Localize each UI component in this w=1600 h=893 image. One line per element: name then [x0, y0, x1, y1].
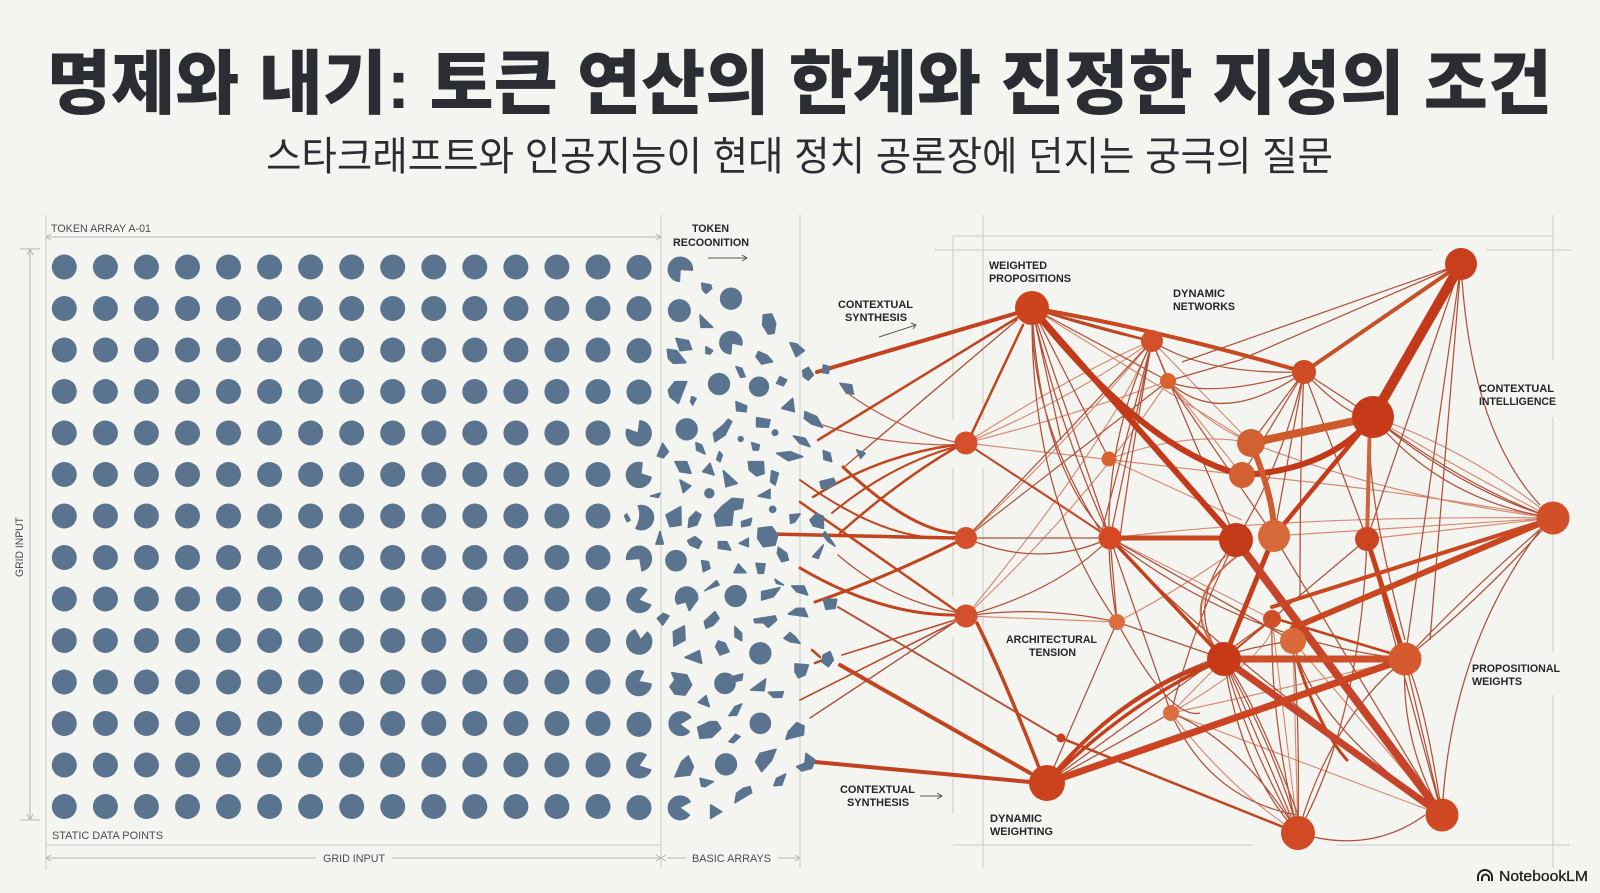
label: token recognition [673, 223, 749, 249]
label: contextual synthesis top: SYNTHESIS [845, 312, 907, 324]
chart: static token grid [52, 254, 611, 819]
label: architectural tension: TENSION [1029, 647, 1076, 659]
label: propositional weights: WEIGHTS [1472, 676, 1522, 688]
label: contextual intelligence: CONTEXTUAL [1479, 383, 1554, 395]
label: weighted propositions [989, 260, 1071, 285]
node: top hub [1445, 248, 1477, 280]
label: dynamic weighting: DYNAMIC [990, 813, 1042, 825]
label: dynamic weighting: WEIGHTING [990, 826, 1053, 838]
logo: NotebookLM: NotebookLM [1499, 868, 1588, 885]
label: token array: TOKEN ARRAY A-01 [51, 223, 151, 235]
label: token recognition: TOKEN [692, 223, 729, 235]
chart: edges from fragments to first network layer [770, 313, 1298, 833]
label: contextual synthesis top: CONTEXTUAL [838, 299, 913, 311]
node: right hub [1536, 502, 1570, 534]
subtitle: 스타크래프트와 인공지능이 현대 정치 공론장에 던지는 궁극의 질문 [266, 135, 1333, 179]
edges: thick [1032, 264, 1553, 815]
label: dynamic networks: NETWORKS [1173, 301, 1235, 313]
label: contextual synthesis bottom: SYNTHESIS [847, 797, 909, 809]
label: propositional weights: PROPOSITIONAL [1472, 663, 1560, 675]
panel: blueprint frame lines [20, 215, 1571, 870]
label: grid input horizontal: GRID INPUT [323, 853, 385, 865]
label: architectural tension: ARCHITECTURAL [1006, 634, 1097, 646]
label: static data points: STATIC DATA POINTS [52, 830, 163, 842]
label: token recognition: RECOONITION [673, 237, 749, 249]
chart: fragmenting tokens lower [626, 545, 837, 820]
label: propositional weights [1472, 663, 1560, 688]
label: contextual synthesis bottom: CONTEXTUAL [840, 784, 915, 796]
label: contextual synthesis top [838, 299, 913, 324]
node: weighted propositions [1015, 291, 1049, 325]
label: dynamic weighting [990, 813, 1053, 838]
label: dynamic networks: DYNAMIC [1173, 288, 1225, 300]
node: largest hub [1352, 396, 1394, 438]
label: weighted propositions: PROPOSITIONS [989, 273, 1071, 285]
label: contextual intelligence [1479, 383, 1556, 408]
nodes [954, 248, 1570, 850]
edges: medium [966, 308, 1390, 760]
node: dynamic weighting [1029, 765, 1065, 801]
label: dynamic networks [1173, 288, 1235, 313]
label: contextual synthesis bottom [840, 784, 915, 809]
label: weighted propositions: WEIGHTED [989, 260, 1047, 272]
arrow: token recognition [708, 255, 747, 261]
label: contextual intelligence: INTELLIGENCE [1479, 396, 1556, 408]
edges: thin light [966, 308, 1553, 833]
label: architectural tension [1006, 634, 1097, 659]
arrow: contextual synthesis top [879, 323, 916, 337]
title: 명제와 내기: 토큰 연산의 한계와 진정한 지성의 조건 [47, 45, 1552, 123]
edges: thin dark [966, 264, 1553, 841]
chart: fragmenting tokens upper [625, 256, 865, 550]
chart: proposition network [954, 248, 1570, 850]
arrow: contextual synthesis bottom [920, 793, 942, 799]
icon: NotebookLM mark [1478, 870, 1492, 881]
label: basic arrays: BASIC ARRAYS [692, 853, 771, 865]
label: grid input vertical: GRID INPUT [14, 517, 26, 577]
